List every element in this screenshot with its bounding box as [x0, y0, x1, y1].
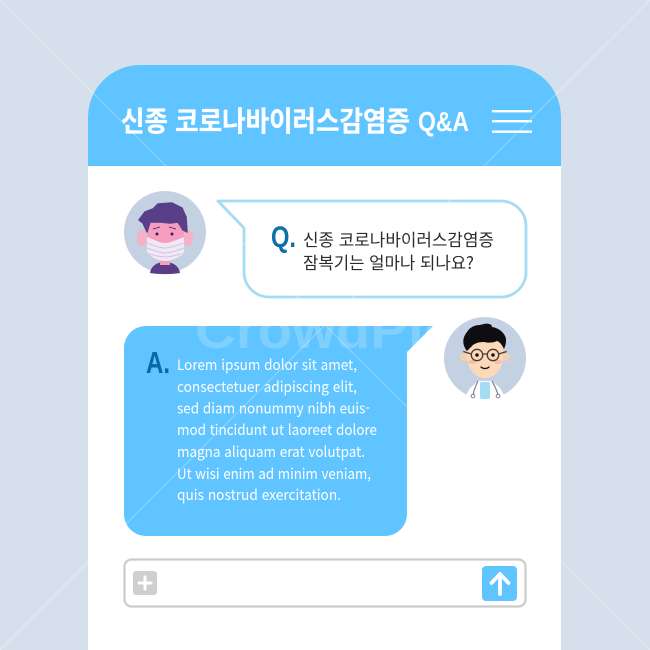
- title: 신종 코로나바이러스감염증: [121, 100, 410, 140]
- answer text: mod tincidunt ut laoreet dolore: [177, 419, 377, 440]
- question text: 신종 코로나바이러스감염증: [303, 226, 494, 251]
- speech bubble: answer: [124, 301, 455, 536]
- icon: send arrow button: [482, 566, 517, 601]
- avatar: doctor: [444, 317, 526, 402]
- answer text: magna aliquam erat volutpat.: [177, 441, 365, 462]
- answer text: sed diam nonummy nibh euis-: [177, 398, 370, 418]
- answer text: consectetuer adipiscing elit,: [177, 376, 357, 397]
- icon: plus button: [133, 571, 157, 595]
- avatar: masked patient: [124, 191, 206, 274]
- panel: phone card: [88, 65, 561, 650]
- input bar: [124, 560, 526, 606]
- answer text: Ut wisi enim ad minim veniam,: [177, 463, 371, 484]
- icon: hamburger menu: [492, 110, 532, 133]
- watermark: CrowdPic: [195, 301, 455, 360]
- label: Q: Q.: [271, 221, 296, 254]
- answer text: quis nostrud exercitation.: [177, 484, 341, 505]
- panel: header bar: [88, 65, 561, 166]
- answer text: Lorem ipsum dolor sit amet,: [177, 354, 357, 375]
- title: Q&A: [418, 106, 469, 137]
- speech bubble: question: [218, 201, 526, 297]
- label: A: A.: [146, 345, 170, 380]
- question text: 잠복기는 얼마나 되나요?: [303, 249, 474, 274]
